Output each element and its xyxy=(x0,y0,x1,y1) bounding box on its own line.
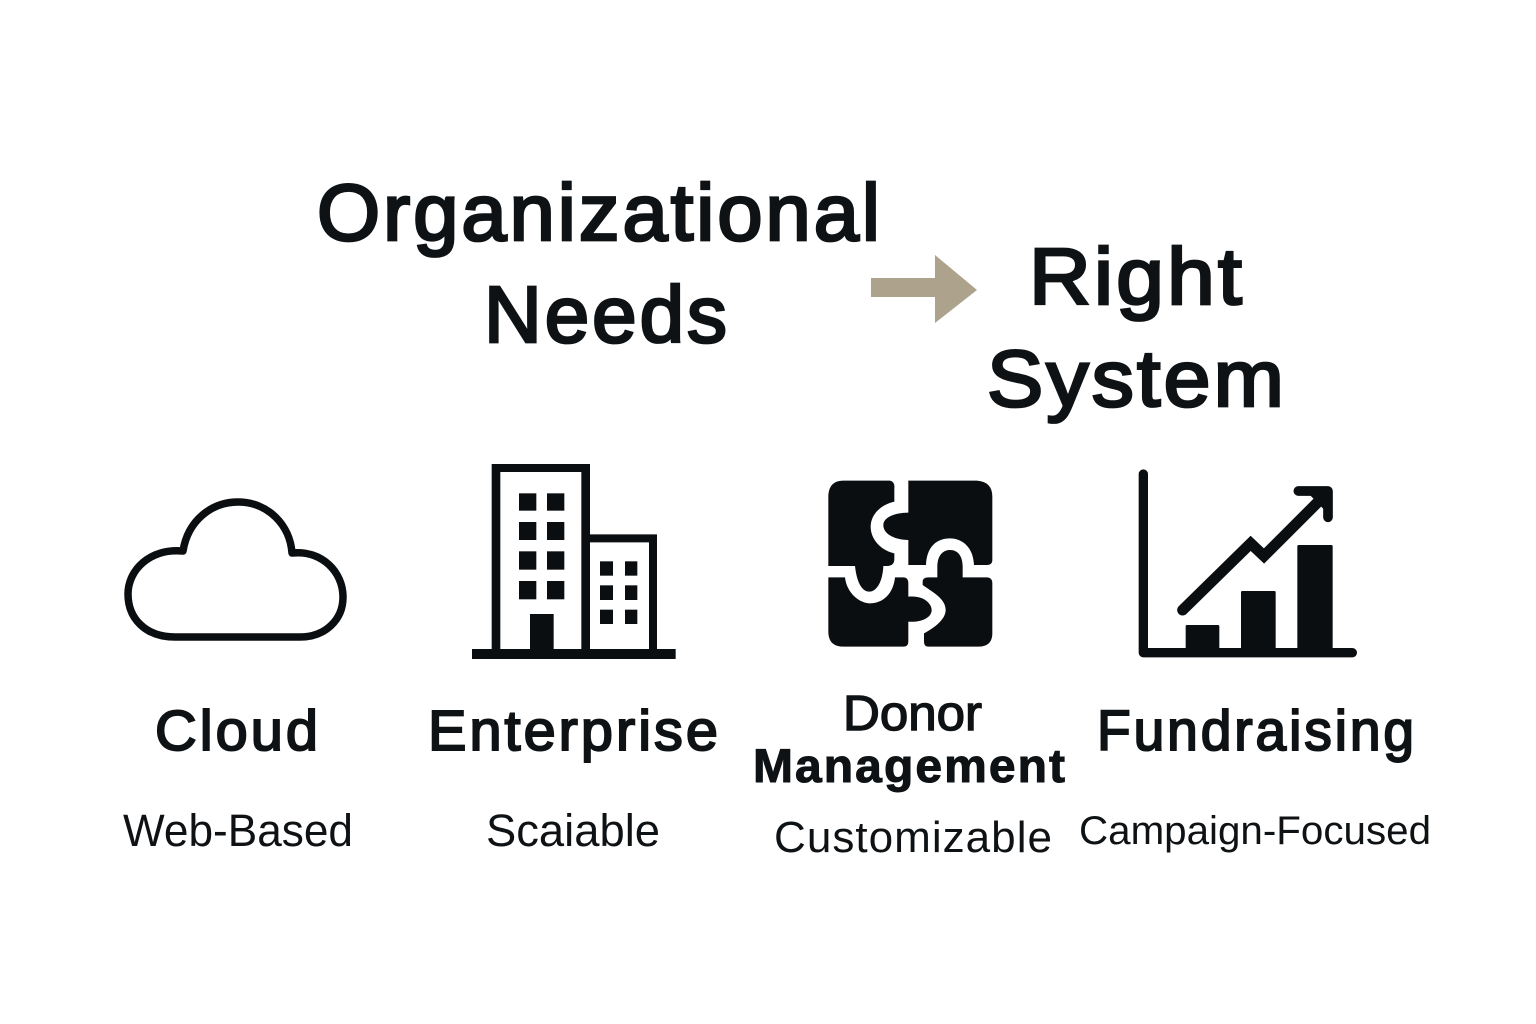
arrow: needs to system xyxy=(871,255,977,323)
panel: fundraising xyxy=(1079,474,1431,853)
description: web-based: Web-Based xyxy=(123,805,353,856)
panel: cloud xyxy=(123,502,353,856)
label: donor management: Donor xyxy=(843,687,982,741)
description: campaign-focused: Campaign-Focused xyxy=(1079,809,1431,853)
label: donor management: Management xyxy=(753,739,1067,792)
heading: right system xyxy=(987,232,1287,423)
panel: donor management xyxy=(753,481,1067,862)
label: fundraising: Fundraising xyxy=(1097,699,1417,763)
heading: organizational needs: Needs xyxy=(484,270,730,359)
label: donor management xyxy=(753,687,1067,792)
heading: right system: System xyxy=(987,334,1287,423)
heading: organizational needs xyxy=(317,168,883,359)
description: customizable: Customizable xyxy=(774,813,1053,862)
heading: right system: Right xyxy=(1029,232,1245,321)
panel: enterprise xyxy=(428,464,721,856)
label: cloud: Cloud xyxy=(155,699,321,763)
icon: growth chart xyxy=(1143,474,1352,653)
icon: cloud xyxy=(128,502,343,637)
icon: puzzle pieces xyxy=(828,481,992,647)
icon: office buildings xyxy=(472,464,676,659)
label: enterprise: Enterprise xyxy=(428,699,721,763)
description: scalable: Scaiable xyxy=(486,805,660,856)
heading: organizational needs: Organizational xyxy=(317,168,883,257)
